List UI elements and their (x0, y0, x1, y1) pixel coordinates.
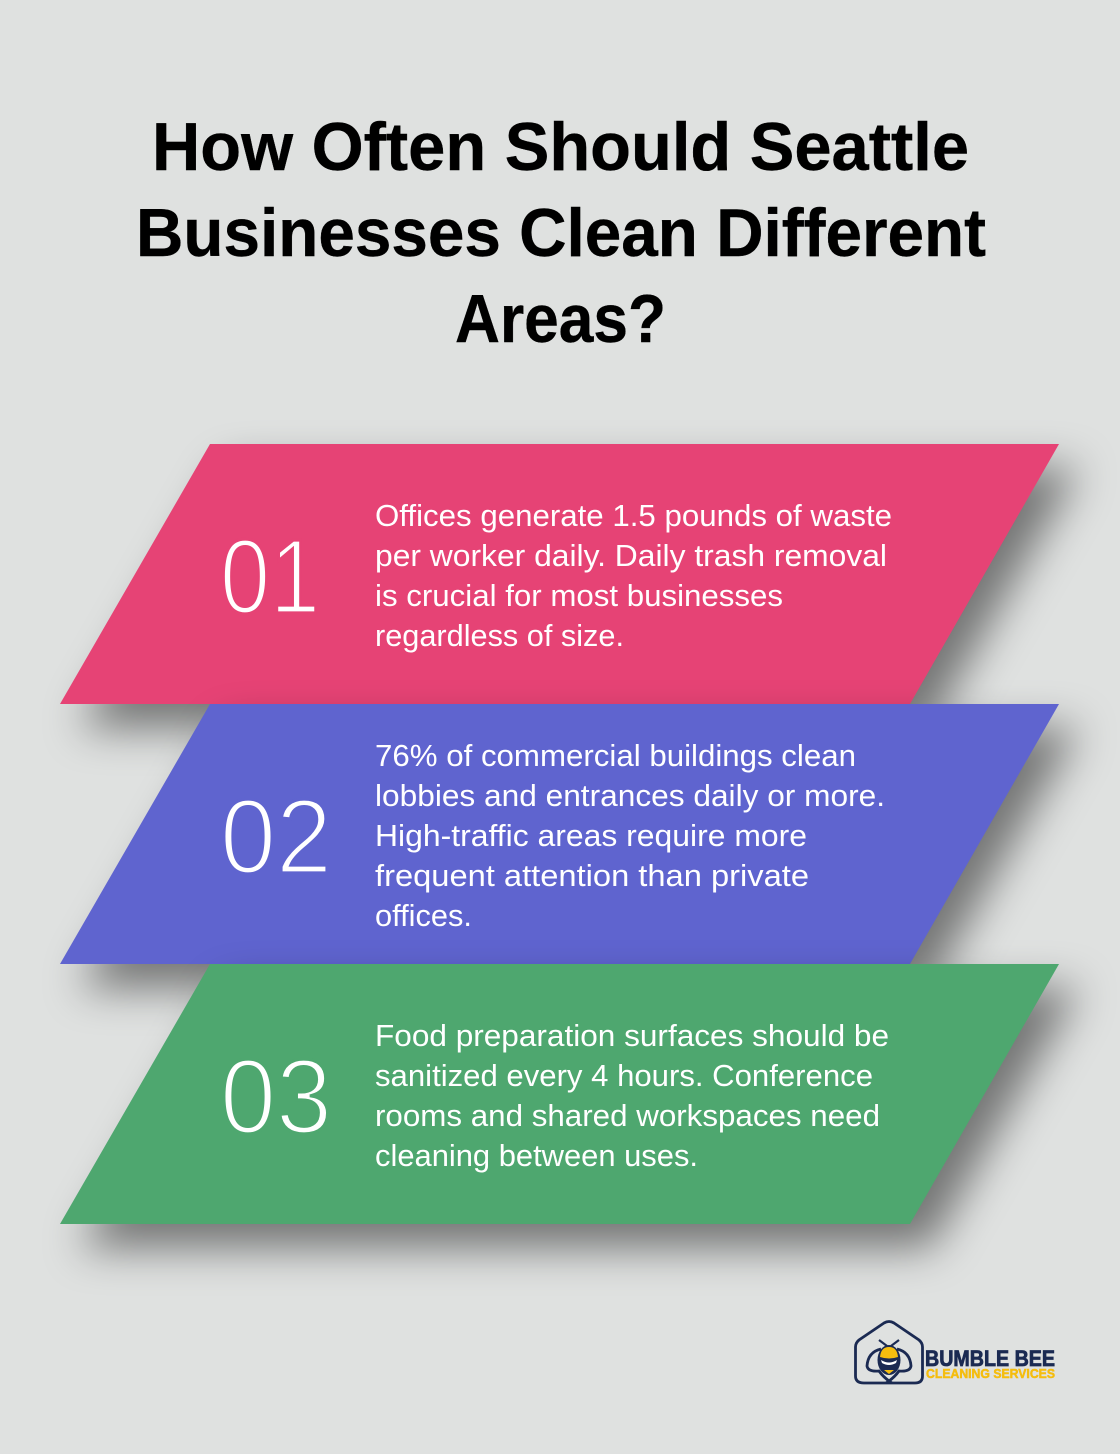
text: step 01 description: is crucial for most businesses (375, 578, 783, 613)
text: step 03 description (375, 1018, 889, 1173)
wordmark: BUMBLE BEE (925, 1346, 1055, 1371)
text: step 02 description: frequent attention than private (375, 858, 809, 893)
text: step 03 description: cleaning between uses. (375, 1138, 698, 1173)
tagline: CLEANING SERVICES (926, 1367, 1055, 1381)
green parallelogram (60, 964, 1059, 1224)
title: How Often Should Seattle (152, 109, 969, 185)
panel: step 02 (60, 704, 1079, 988)
number 01: 01 (220, 518, 320, 636)
pink parallelogram (60, 444, 1059, 704)
logo: Bumble Bee Cleaning Services (856, 1322, 1055, 1383)
panel: step 03 (60, 964, 1079, 1248)
text: step 02 description: High-traffic areas require more (375, 818, 807, 853)
title: Areas? (455, 281, 666, 357)
text: step 02 description: offices. (375, 898, 472, 933)
blue parallelogram (60, 704, 1059, 964)
number 02: 02 (220, 778, 332, 896)
text: step 03 description: rooms and shared workspaces need (375, 1098, 880, 1133)
icon: house with bee (856, 1322, 922, 1383)
text: step 01 description (375, 498, 892, 653)
text: step 03 description: Food preparation surfaces should be (375, 1018, 889, 1053)
panel: step 01 (60, 444, 1079, 728)
text: step 01 description: regardless of size. (375, 618, 624, 653)
text: step 02 description: lobbies and entrances daily or more. (375, 778, 885, 813)
text: step 01 description: per worker daily. Daily trash removal (375, 538, 887, 573)
number 03: 03 (220, 1038, 332, 1156)
title (136, 109, 986, 357)
title: Businesses Clean Different (136, 195, 986, 271)
text: step 01 description: Offices generate 1.5 pounds of waste (375, 498, 892, 533)
text: step 02 description: 76% of commercial buildings clean (375, 738, 856, 773)
text: step 03 description: sanitized every 4 hours. Conference (375, 1058, 873, 1093)
text: step 02 description (375, 738, 885, 933)
